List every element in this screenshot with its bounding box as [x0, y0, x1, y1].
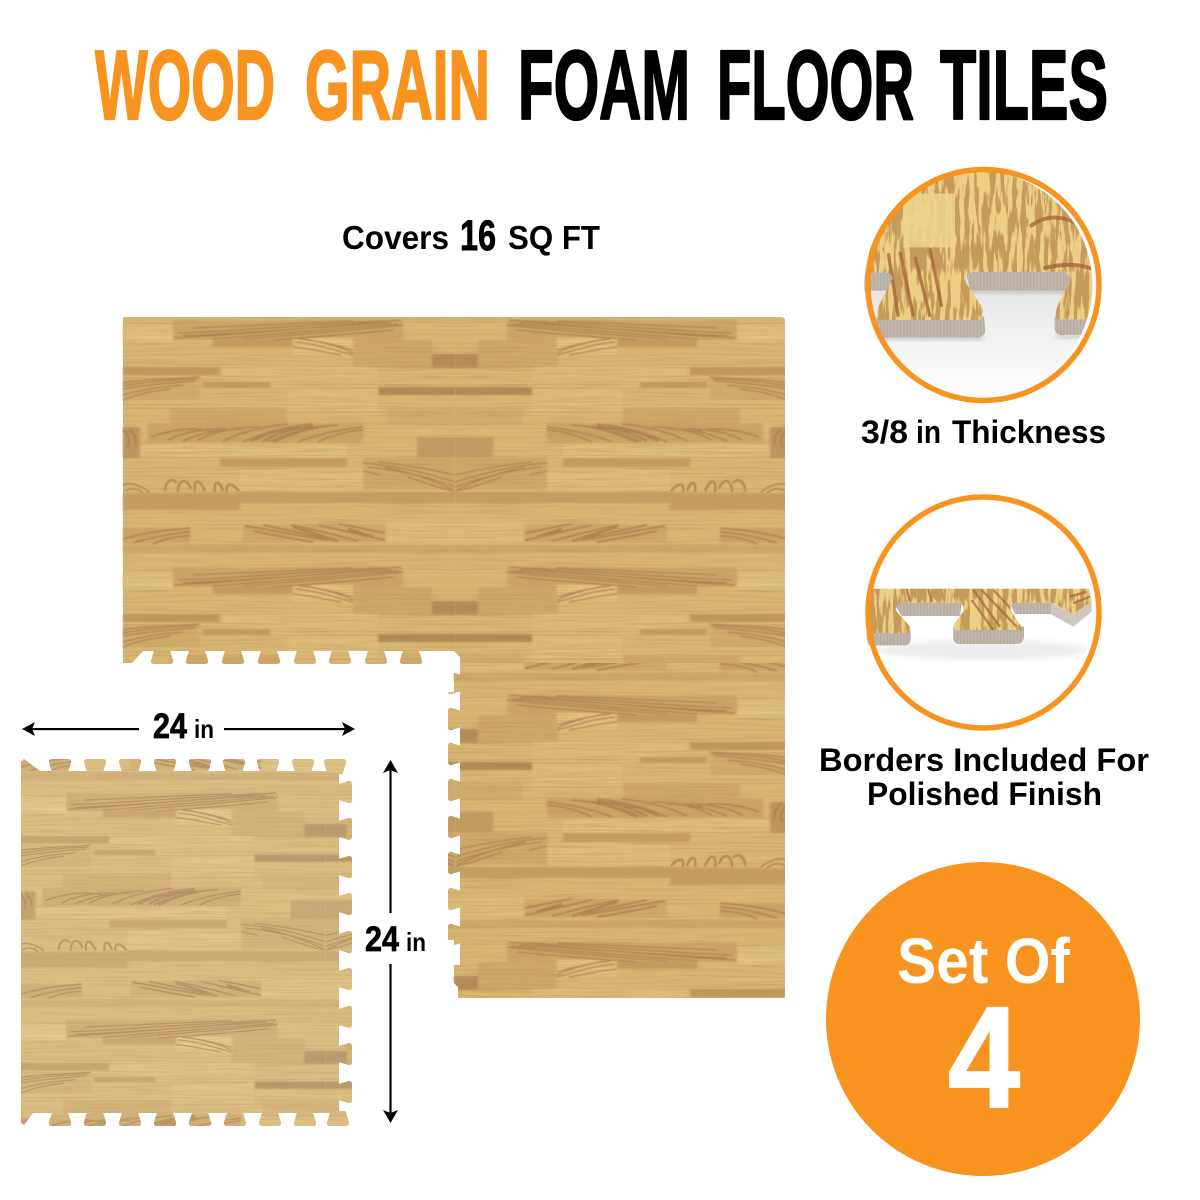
panel: thickness close-up circle	[860, 160, 1100, 403]
up arrow	[383, 760, 398, 913]
title: black words: FLOOR	[717, 30, 914, 140]
thickness caption: in	[916, 414, 941, 450]
large L-shaped wood tile assembly	[122, 317, 785, 998]
coverage label: Covers	[342, 219, 449, 256]
coverage label: SQ FT	[508, 219, 600, 256]
width label: in	[194, 714, 214, 744]
borders caption	[819, 742, 1149, 812]
height label	[365, 920, 426, 959]
title	[95, 30, 1108, 140]
left arrow	[22, 722, 139, 736]
badge: set of 4: Set Of	[897, 925, 1071, 997]
horizontal dimension: 24 in	[22, 707, 355, 746]
title: orange words: WOOD	[95, 30, 275, 140]
width label: 24	[153, 707, 187, 746]
badge: set of 4	[826, 862, 1140, 1176]
vertical dimension: 24 in	[365, 760, 426, 1123]
width label	[153, 707, 214, 746]
panel: borders close-up circle	[867, 497, 1099, 728]
title: orange words: GRAIN	[305, 30, 490, 140]
down arrow	[383, 964, 398, 1123]
borders caption: Polished Finish	[867, 776, 1102, 812]
height label: 24	[365, 920, 399, 959]
single wood tile	[21, 759, 352, 1126]
thickness caption: Thickness	[952, 414, 1106, 450]
height label: in	[406, 927, 426, 957]
right arrow	[224, 722, 355, 736]
title: black words	[518, 30, 1108, 140]
thickness caption	[861, 414, 1106, 450]
coverage label	[342, 212, 600, 260]
coverage label: 16	[460, 212, 496, 260]
title: black words: FOAM	[518, 30, 690, 140]
badge: set of 4: 4	[948, 977, 1020, 1138]
borders caption: Borders Included For	[819, 742, 1149, 778]
thickness caption: 3/8	[861, 414, 908, 450]
